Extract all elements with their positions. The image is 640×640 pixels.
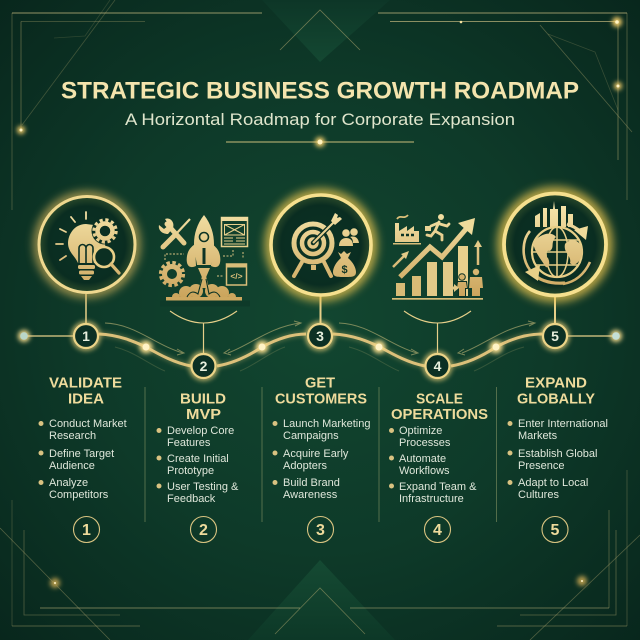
heading: BUILD bbox=[180, 392, 226, 408]
bottom number 2 bbox=[190, 516, 216, 542]
wireframe window bbox=[221, 217, 248, 246]
bottom number 3 bbox=[308, 516, 334, 542]
bullets: Launch Marketing bbox=[283, 418, 370, 430]
step node 4: 4 bbox=[434, 358, 442, 374]
heading: VALIDATE bbox=[49, 376, 122, 392]
runner bbox=[425, 214, 449, 240]
bullets: Markets bbox=[518, 430, 558, 442]
bottom number 3: 3 bbox=[316, 522, 325, 539]
step node 1 bbox=[71, 321, 101, 351]
heading: IDEA bbox=[68, 392, 105, 408]
glowing dots bbox=[18, 330, 622, 354]
heading: GLOBALLY bbox=[517, 392, 595, 408]
bars bbox=[396, 283, 405, 296]
step node 3: 3 bbox=[316, 328, 324, 344]
bullets: Analyze bbox=[49, 477, 88, 489]
step node 5: 5 bbox=[551, 328, 559, 344]
heading: OPERATIONS bbox=[391, 407, 488, 423]
column: expand globally bbox=[508, 376, 608, 501]
bullets: Cultures bbox=[518, 489, 559, 501]
column: validate idea bbox=[38, 376, 127, 501]
bullets: Campaigns bbox=[283, 430, 339, 442]
heading: SCALE bbox=[416, 392, 463, 408]
bullets: Awareness bbox=[283, 489, 338, 501]
heading bbox=[49, 376, 122, 408]
bullets: Establish Global bbox=[518, 448, 598, 460]
bullets: Build Brand bbox=[283, 477, 340, 489]
bullets: Processes bbox=[399, 437, 451, 449]
title: STRATEGIC BUSINESS GROWTH ROADMAP bbox=[61, 78, 579, 104]
gear bbox=[160, 262, 184, 286]
bullets: Acquire Early bbox=[283, 448, 349, 460]
icon: target, audience and money bag: $ bbox=[341, 264, 348, 276]
bullets: Workflows bbox=[399, 465, 450, 477]
rocket bbox=[187, 215, 220, 282]
bottom number 1: 1 bbox=[82, 522, 91, 539]
icon: target, audience and money bag bbox=[271, 195, 371, 295]
step node 3 bbox=[305, 321, 335, 351]
heading bbox=[275, 376, 367, 408]
bullets bbox=[156, 425, 239, 505]
heading bbox=[391, 392, 488, 423]
bullets: Conduct Market bbox=[49, 418, 127, 430]
glowing route bbox=[99, 334, 542, 366]
bullets bbox=[38, 418, 127, 501]
bullets: Research bbox=[49, 430, 96, 442]
bottom number 5: 5 bbox=[551, 522, 560, 539]
bullets: Infrastructure bbox=[399, 493, 464, 505]
bullets: Feedback bbox=[167, 493, 216, 505]
column: build mvp bbox=[156, 392, 239, 505]
bullets: Develop Core bbox=[167, 425, 234, 437]
connectors bbox=[86, 294, 555, 353]
icon: rocket and tools bbox=[159, 215, 250, 306]
heading: CUSTOMERS bbox=[275, 392, 367, 408]
code window: </> bbox=[230, 271, 243, 281]
column: scale operations bbox=[389, 392, 488, 505]
heading: MVP bbox=[186, 407, 221, 423]
step node 4 bbox=[422, 351, 452, 381]
bullets: Features bbox=[167, 437, 211, 449]
heading: EXPAND bbox=[525, 376, 587, 392]
icon: growth chart with factory and people bbox=[392, 214, 483, 300]
bullets: Adopters bbox=[283, 460, 328, 472]
bullets: Enter International bbox=[518, 418, 608, 430]
bottom number 5 bbox=[542, 516, 568, 542]
thin guide arrows bbox=[105, 321, 535, 371]
title divider bbox=[226, 137, 414, 147]
step node 2 bbox=[188, 351, 218, 381]
bullets: Define Target bbox=[49, 448, 114, 460]
bullets: Automate bbox=[399, 453, 446, 465]
icon: lightbulb with gear and magnifier bbox=[39, 196, 135, 292]
step node 5 bbox=[540, 321, 570, 351]
wrench and screwdriver bbox=[159, 219, 190, 247]
bullets bbox=[389, 425, 477, 505]
people bbox=[473, 269, 479, 275]
step node 1: 1 bbox=[82, 328, 90, 344]
icon: globe with skyline bbox=[504, 194, 630, 296]
bottom number 1 bbox=[74, 516, 100, 542]
bottom number 4: 4 bbox=[433, 522, 442, 539]
column: get customers bbox=[272, 376, 370, 501]
step node 2: 2 bbox=[200, 358, 208, 374]
bullets: Adapt to Local bbox=[518, 477, 588, 489]
launch cloud bbox=[160, 272, 250, 306]
bottom number 2: 2 bbox=[199, 522, 208, 539]
bullets: User Testing & bbox=[167, 481, 239, 493]
bullets: Optimize bbox=[399, 425, 442, 437]
subtitle: A Horizontal Roadmap for Corporate Expansion bbox=[125, 110, 515, 129]
bullets bbox=[272, 418, 370, 501]
heading: GET bbox=[305, 376, 335, 392]
heading bbox=[180, 392, 226, 423]
bullets: Expand Team & bbox=[399, 481, 477, 493]
bullets: Competitors bbox=[49, 489, 109, 501]
factory bbox=[395, 223, 419, 242]
bullets: Prototype bbox=[167, 465, 214, 477]
bullets: Audience bbox=[49, 460, 95, 472]
bullets: Create Initial bbox=[167, 453, 229, 465]
roadmap path bbox=[18, 294, 622, 371]
heading bbox=[517, 376, 595, 408]
bullets bbox=[508, 418, 608, 501]
bullets: Presence bbox=[518, 460, 564, 472]
bottom number 4 bbox=[424, 516, 450, 542]
trend arrow bbox=[400, 229, 466, 277]
